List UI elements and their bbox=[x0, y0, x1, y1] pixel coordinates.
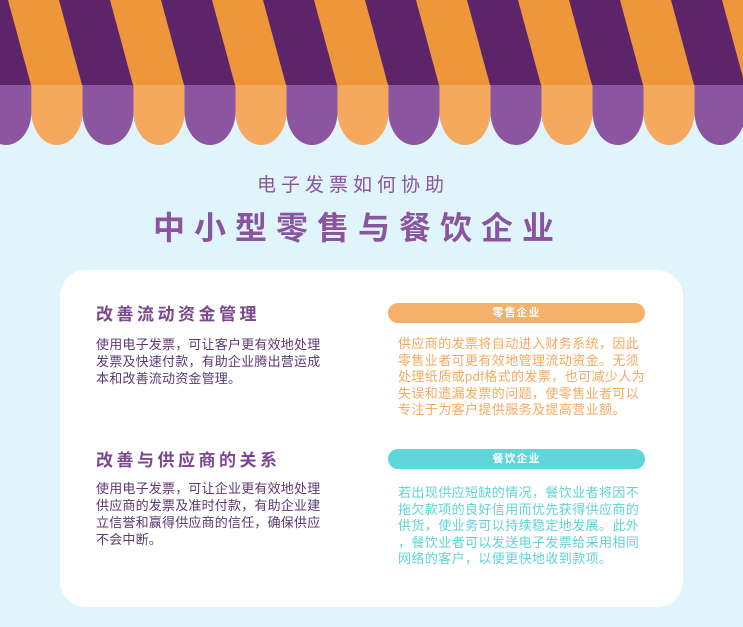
text: cash flow: 发票及快速付款，有助企业腾出营运成 bbox=[96, 354, 320, 369]
text: supplier relations: 供应商的发票及准时付款，有助企业建 bbox=[96, 498, 320, 513]
text: food: 若出现供应短缺的情况，餐饮业者将因不 bbox=[398, 485, 639, 500]
text: supplier relations: 不会中断。 bbox=[96, 532, 162, 547]
text: cash flow: 使用电子发票，可让客户更有效地处理 bbox=[96, 337, 320, 352]
text: retail bbox=[398, 336, 645, 417]
pill: retail bbox=[388, 303, 645, 323]
text: supplier relations bbox=[96, 481, 320, 547]
text: retail: 失误和遗漏发票的问题，使零售业者可以 bbox=[398, 386, 639, 401]
text: cash flow bbox=[96, 337, 320, 386]
panel: content card bbox=[60, 270, 683, 607]
awning bbox=[0, 0, 743, 145]
text: retail: 供应商的发票将自动进入财务系统，因此 bbox=[398, 336, 639, 351]
text: food: 供货，使业务可以持续稳定地发展。此外 bbox=[398, 518, 639, 533]
heading: cash flow: 改善流动资金管理 bbox=[96, 305, 260, 324]
pill: food bbox=[388, 449, 645, 469]
text: retail: 处理纸质或pdf格式的发票，也可减少人为 bbox=[398, 369, 645, 384]
text: cash flow: 本和改善流动资金管理。 bbox=[96, 371, 241, 386]
text: food: 拖欠款项的良好信用而优先获得供应商的 bbox=[398, 502, 639, 517]
text: food: ，餐饮业者可以发送电子发票给采用相同 bbox=[398, 535, 639, 550]
text: food: 网络的客户，以便更快地收到款项。 bbox=[398, 551, 612, 566]
text: supplier relations: 使用电子发票，可让企业更有效地处理 bbox=[96, 481, 320, 496]
main title: 中小型零售与餐饮企业 bbox=[153, 210, 563, 246]
pill: food: 餐饮企业 bbox=[492, 453, 540, 465]
text: food bbox=[398, 485, 639, 566]
heading: supplier relations: 改善与供应商的关系 bbox=[96, 451, 280, 470]
text: retail: 零售业者可更有效地管理流动资金。无须 bbox=[398, 353, 639, 368]
text: retail: 专注于为客户提供服务及提高营业额。 bbox=[398, 402, 626, 417]
text: supplier relations: 立信誉和赢得供应商的信任，确保供应 bbox=[96, 515, 320, 530]
subtitle: 电子发票如何协助 bbox=[257, 175, 449, 196]
pill: retail: 零售企业 bbox=[492, 307, 540, 319]
